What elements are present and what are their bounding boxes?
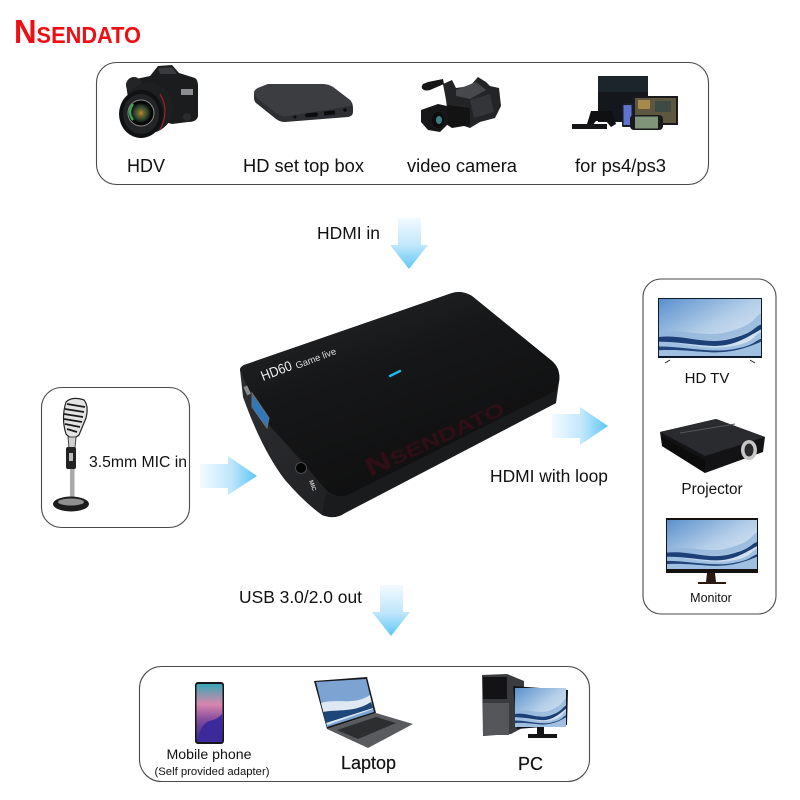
icon: monitor <box>666 518 758 584</box>
watermark: Nsendato <box>361 394 508 482</box>
panel: computer outputs <box>140 666 590 782</box>
arrow: HDMI in <box>390 218 428 269</box>
brand logo: Nsendato <box>14 13 141 50</box>
icon: video camera <box>421 77 501 132</box>
label: USB 3.0/2.0 out: USB 3.0/2.0 out <box>239 587 362 607</box>
arrow: HDMI out <box>552 407 608 445</box>
label: Laptop: Laptop <box>341 753 396 773</box>
device text: Game live: Game live <box>294 346 338 372</box>
icon: game consoles <box>572 76 678 130</box>
icon: PC tower and monitor <box>482 674 568 738</box>
device text: HD60: HD60 <box>258 358 294 384</box>
arrow: MIC in <box>200 456 257 495</box>
label: HDV: HDV <box>127 156 165 176</box>
icon: DSLR camera <box>119 65 198 138</box>
panel: video sources <box>96 62 708 184</box>
label: Self provided adapter: (Self provided adapter) <box>154 766 270 778</box>
label: HD TV: HD TV <box>685 370 729 387</box>
MIC jack: MIC <box>307 480 317 493</box>
panel: microphone input <box>42 388 190 528</box>
icon: projector <box>660 419 765 473</box>
USB port <box>252 393 269 428</box>
label: Monitor: Monitor <box>690 591 732 605</box>
icon: mobile phone <box>195 682 224 744</box>
label: HDMI in: HDMI in <box>317 223 380 243</box>
icon: microphone <box>53 398 89 512</box>
arrow: USB out <box>372 585 410 636</box>
label: Projector: Projector <box>681 481 743 498</box>
label: PC: PC <box>518 754 543 774</box>
label: for ps4/ps3: for ps4/ps3 <box>575 156 666 176</box>
device: HD60 capture card <box>240 292 559 517</box>
label: Mobile phone: Mobile phone <box>166 746 252 762</box>
icon: laptop <box>314 677 413 748</box>
status LED <box>390 371 400 376</box>
label: HD set top box: HD set top box <box>243 156 364 176</box>
panel: display outputs <box>643 279 776 614</box>
icon: HD TV <box>658 298 762 363</box>
label: HDMI with loop: HDMI with loop <box>490 466 608 486</box>
icon: set top box <box>254 84 353 122</box>
label: 3.5mm MIC in: 3.5mm MIC in <box>89 454 187 471</box>
MIC jack <box>296 462 317 493</box>
HDMI port label <box>243 386 251 395</box>
label: video camera: video camera <box>407 156 518 176</box>
